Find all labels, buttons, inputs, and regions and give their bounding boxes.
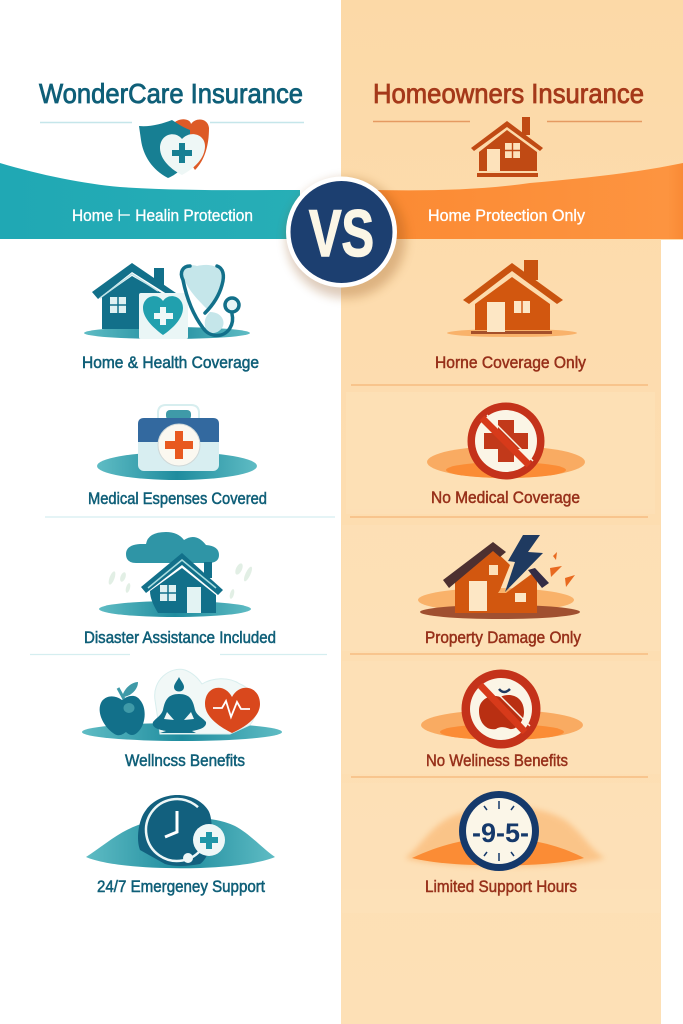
row: home coverage only <box>435 260 586 372</box>
badge: VS: VS <box>309 196 374 270</box>
icon: crossed medical symbol <box>427 402 585 480</box>
title: Homeowners Insurance: Homeowners Insurance <box>373 78 644 109</box>
icon: 9-5 clock: -9-5- <box>472 818 529 848</box>
icon: crossed apple <box>421 670 583 748</box>
icon: house struck by lightning <box>418 535 580 619</box>
row: no wellness benefits <box>421 670 583 770</box>
icon: shield and heart <box>139 119 209 178</box>
row: home and health coverage <box>82 263 259 372</box>
panel: section shading <box>342 392 660 913</box>
icon: apple, meditation and heart <box>82 669 282 741</box>
label: 24/7 Emergeney Support <box>97 877 265 896</box>
label: Limited Support Hours <box>425 877 577 896</box>
row: property damage only <box>418 535 581 647</box>
label: Horne Coverage Only <box>435 353 586 372</box>
icon: orange house <box>447 260 577 337</box>
label: No Medical Coverage <box>431 488 580 507</box>
icon: clock with medical badge <box>86 787 275 873</box>
subtitle: home only: Home Protection Only <box>428 207 586 225</box>
band: teal subtitle ribbon <box>0 163 300 239</box>
icon: storm cloud over house <box>99 532 254 617</box>
label: Disaster Assistance Included <box>84 628 276 647</box>
row: limited support hours <box>405 791 605 896</box>
icon: house header <box>471 117 543 177</box>
icon: house, heart card and stethoscope <box>84 263 250 339</box>
label: No Weliness Benefits <box>426 751 568 770</box>
panel: homeowners background <box>341 0 683 1024</box>
row: no medical coverage <box>427 402 585 507</box>
badge: VS <box>286 176 406 298</box>
icon: medical bag <box>97 405 257 480</box>
icon: 9-5 clock <box>405 791 605 871</box>
label: Wellncss Benefits <box>125 751 245 770</box>
row: 24/7 emergency support <box>86 787 275 896</box>
label: Home & Health Coverage <box>82 353 259 372</box>
row: medical expenses covered <box>88 405 267 508</box>
label: Medical Espenses Covered <box>88 489 267 508</box>
title: WonderCare Insurance: WonderCare Insurance <box>39 78 303 109</box>
band: orange subtitle ribbon <box>375 163 683 239</box>
row: wellness benefits <box>82 669 282 770</box>
label: Property Damage Only <box>425 628 581 647</box>
subtitle: home and health: Home ⊢ Healin Protection <box>72 207 253 225</box>
row: disaster assistance included <box>84 532 276 647</box>
